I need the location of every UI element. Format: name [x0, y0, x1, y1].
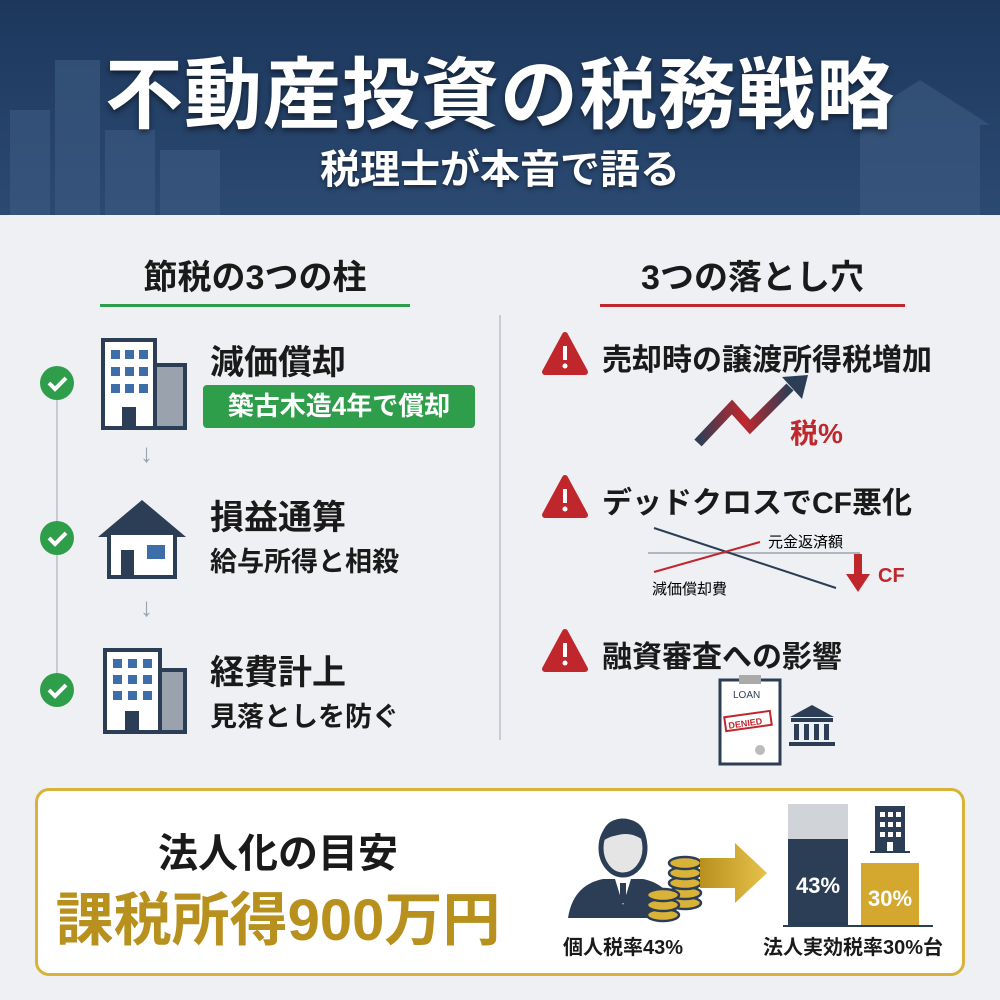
chart: dead cross: CF	[878, 565, 905, 587]
text: 融資審査: 融資審査への影響	[602, 641, 842, 674]
heading: right	[600, 250, 905, 307]
heading: left	[100, 250, 410, 307]
panel: incorporation	[35, 788, 965, 976]
icon: house	[98, 500, 186, 579]
label: 法人実効税率30%台: 法人実効税率30%台	[763, 937, 943, 959]
chart: dead cross: 元金返済額	[768, 534, 843, 551]
arrow: ↓	[140, 592, 153, 622]
icon: loan denied: LOAN	[733, 690, 760, 701]
text: 経費計上: 経費計上	[210, 654, 346, 692]
icon: loan denied: DENIED	[728, 716, 763, 731]
heading: right: 3つの落とし穴	[641, 259, 864, 297]
green badge	[203, 385, 475, 428]
chart: dead cross	[648, 527, 905, 598]
panel: right pitfalls	[542, 332, 932, 766]
text: 損益通算: 損益通算	[210, 499, 346, 537]
panel: left pillars: 見落としを防ぐ	[210, 702, 399, 732]
decorative skyline	[10, 60, 990, 215]
subtitle: 税理士が本音で語る	[320, 148, 680, 192]
arrow: gold	[700, 843, 767, 903]
chart: tax bars: 30%	[868, 886, 912, 911]
panel: left pillars	[40, 338, 475, 734]
heading: left: 節税の3つの柱	[144, 259, 366, 297]
title: 不動産投資の税務戦略	[105, 51, 895, 139]
text: 課税所得900万円: 課税所得900万円	[56, 888, 500, 953]
check icons	[40, 366, 74, 707]
icon: rising arrow	[694, 375, 808, 446]
panel: left pillars: 給与所得と相殺	[210, 547, 399, 577]
icon: person with coins	[568, 818, 702, 922]
header banner	[0, 0, 1000, 215]
chart: tax bars: 43%	[796, 873, 840, 898]
text: 売却時: 売却時の譲渡所得税増加	[602, 344, 932, 377]
arrow: ↓	[140, 438, 153, 468]
icon: building 2	[103, 648, 187, 734]
icon: loan denied	[718, 675, 835, 766]
text: 減価償却: 減価償却	[210, 344, 346, 382]
icon: building 1	[101, 338, 187, 430]
label: 個人税率43%: 個人税率43%	[563, 937, 683, 959]
heading: 法人化の目安: 法人化の目安	[158, 832, 398, 876]
green badge: 築古木造4年で償却	[228, 391, 450, 421]
warning icons	[542, 332, 588, 672]
chart: dead cross: 減価償却費	[652, 581, 727, 598]
chart: tax bars	[783, 804, 933, 927]
text: 税%: 税%	[790, 418, 843, 449]
text: デッドクロス: デッドクロスでCF悪化	[602, 487, 912, 520]
